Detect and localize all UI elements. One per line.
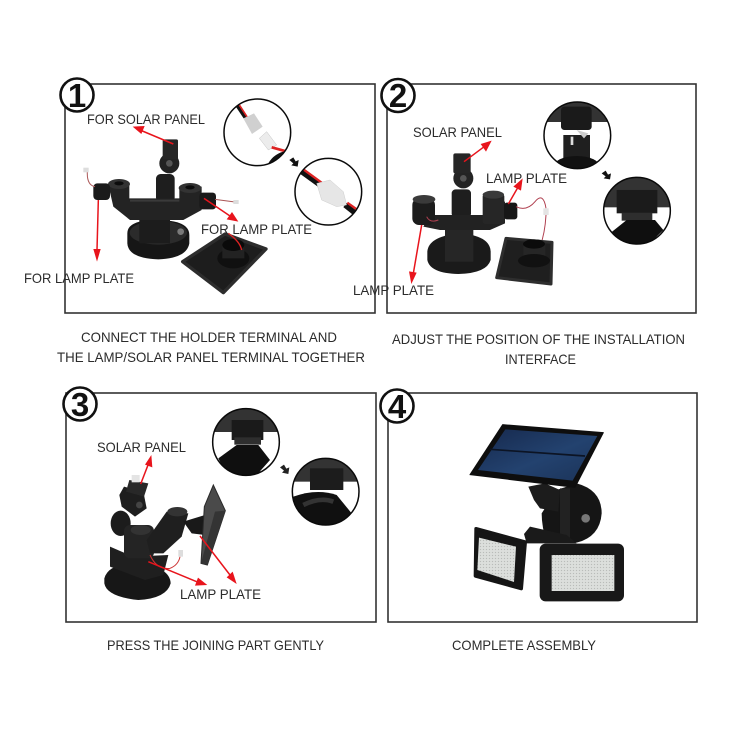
caption 1: THE LAMP/SOLAR PANEL TERMINAL TOGETHER bbox=[57, 349, 365, 365]
panel 2 labels: LAMP PLATE bbox=[486, 170, 567, 186]
badge 2 bbox=[382, 77, 414, 114]
left lamp bbox=[475, 529, 525, 589]
solar panel bbox=[470, 425, 603, 487]
panel 2 detail circle: apart bbox=[543, 101, 612, 170]
panel 1 small arrow bbox=[289, 157, 299, 167]
caption 2: INTERFACE bbox=[505, 351, 576, 367]
caption 2 bbox=[392, 331, 685, 367]
panel 1 connector circle: separated bbox=[224, 99, 291, 170]
panel 2 frame bbox=[387, 84, 696, 313]
panel 1 lamp plate illustration bbox=[183, 233, 266, 293]
panel 3 labels bbox=[97, 439, 261, 602]
panel 3 frame bbox=[66, 393, 376, 622]
panel 3 lamp plate illustration bbox=[201, 485, 225, 565]
badge 3: 3 bbox=[71, 386, 89, 423]
panel 2 labels: LAMP PLATE bbox=[353, 282, 434, 298]
caption 2: ADJUST THE POSITION OF THE INSTALLATION bbox=[392, 331, 685, 347]
panel 1 connector circle: joined bbox=[295, 158, 363, 225]
caption 4: COMPLETE ASSEMBLY bbox=[452, 637, 597, 653]
assembled solar light bbox=[470, 425, 624, 601]
panel 3 red arrows bbox=[141, 455, 237, 586]
panel 3 holder illustration bbox=[104, 475, 205, 600]
panel 1 labels: FOR SOLAR PANEL bbox=[87, 111, 205, 127]
panel 4 frame bbox=[388, 393, 697, 622]
panel 2 holder illustration bbox=[412, 153, 549, 274]
badge 4 bbox=[380, 388, 414, 425]
panel 3 detail circle: closed bbox=[292, 458, 359, 527]
arm bbox=[524, 527, 577, 543]
caption 1: CONNECT THE HOLDER TERMINAL AND bbox=[81, 329, 337, 345]
badge 3 bbox=[64, 386, 96, 423]
panel 1 labels bbox=[24, 111, 312, 286]
panel 2 red arrows bbox=[409, 141, 523, 284]
panel 1 red arrows bbox=[93, 126, 238, 262]
panel 3 labels: LAMP PLATE bbox=[180, 586, 261, 602]
caption 3: PRESS THE JOINING PART GENTLY bbox=[107, 637, 325, 653]
panel 3 labels: SOLAR PANEL bbox=[97, 439, 186, 455]
panel 2 labels bbox=[353, 124, 567, 298]
panel 2 labels: SOLAR PANEL bbox=[413, 124, 502, 140]
panel 1 holder illustration bbox=[83, 139, 239, 259]
wall mount bbox=[542, 483, 602, 543]
panel 2: adjust interface bbox=[353, 77, 696, 313]
badge 2: 2 bbox=[389, 77, 407, 114]
caption 1 bbox=[57, 329, 365, 365]
panel 2 small arrow bbox=[602, 171, 611, 179]
badge 4: 4 bbox=[388, 388, 407, 425]
badge 1 bbox=[60, 77, 94, 114]
panel 3 small arrow bbox=[280, 465, 289, 474]
panel 2 detail circle: joined bbox=[603, 177, 673, 247]
panel 1: connect terminals bbox=[24, 77, 375, 313]
badge 1: 1 bbox=[68, 77, 86, 114]
right lamp bbox=[540, 544, 624, 601]
panel 3 detail circle: gap bbox=[213, 409, 279, 475]
panel 3: press joint bbox=[64, 386, 376, 622]
panel 1 labels: FOR LAMP PLATE bbox=[24, 270, 134, 286]
panel 1 frame bbox=[65, 84, 375, 313]
panel 2 lamp plate illustration bbox=[497, 238, 552, 284]
panel 4: complete assembly bbox=[380, 388, 697, 622]
panel 1 labels: FOR LAMP PLATE bbox=[201, 221, 312, 237]
